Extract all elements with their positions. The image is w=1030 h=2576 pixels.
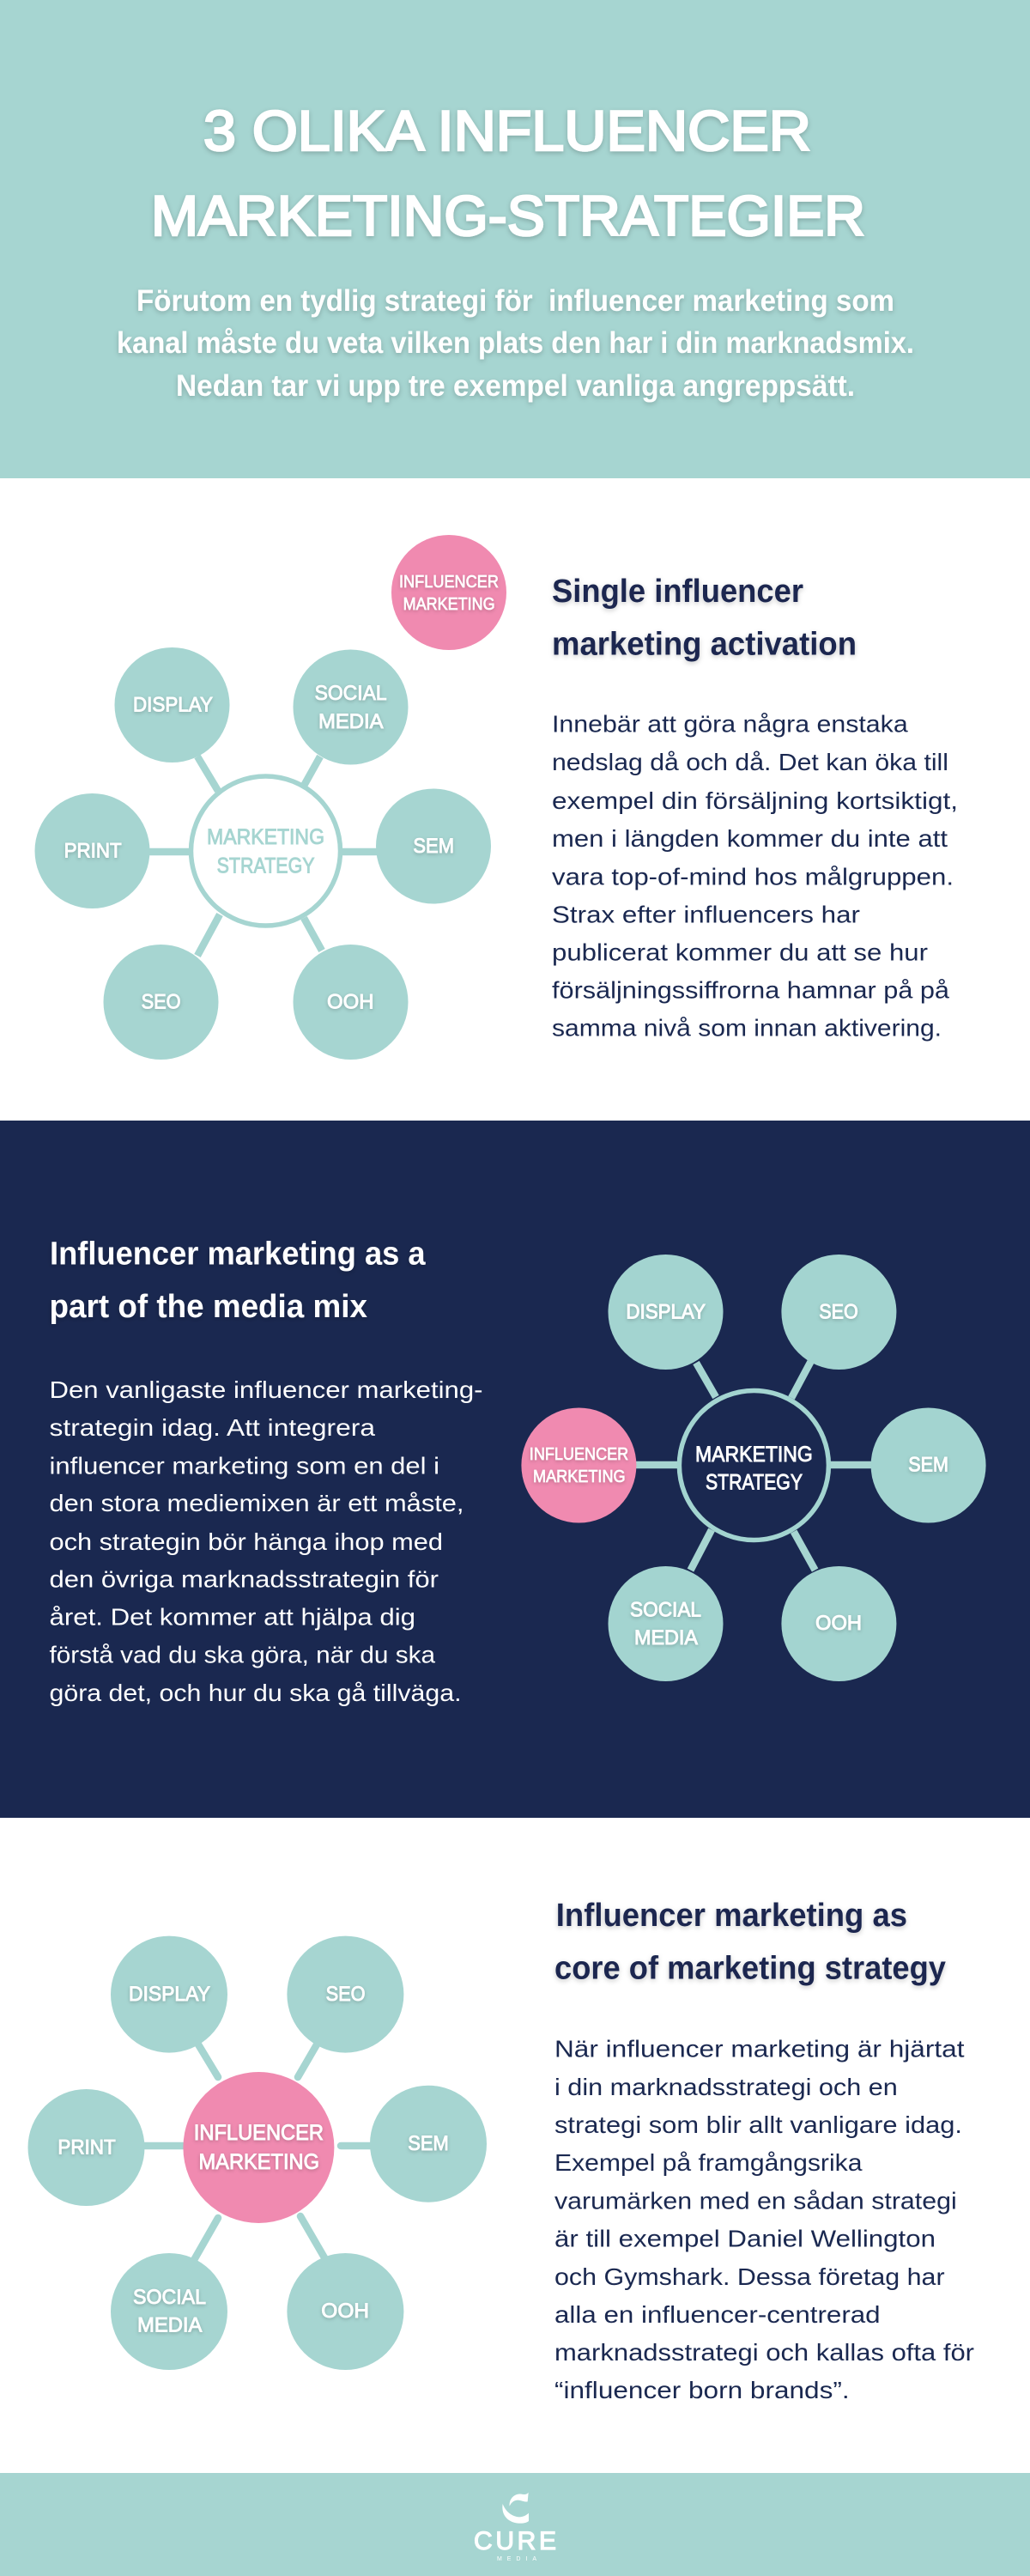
node: social media: MEDIA xyxy=(634,1626,698,1649)
intro text: kanal måste du veta vilken plats den har i din marknadsmix. xyxy=(117,326,914,360)
body text: single activation: nedslag då och då. Det kan öka till xyxy=(552,749,948,775)
title: 3 OLIKA INFLUENCER xyxy=(203,99,811,162)
node: social media: MEDIA xyxy=(137,2313,202,2337)
panel: influencer marketing as part of the media mix xyxy=(0,1121,1030,1818)
body text: single activation: samma nivå som innan aktivering. xyxy=(552,1015,942,1041)
hub: marketing strategy: MARKETING xyxy=(695,1443,813,1467)
node: display: DISPLAY xyxy=(133,694,213,717)
node: print xyxy=(34,793,149,908)
body text: media mix: strategin idag. Att integrera xyxy=(50,1414,375,1441)
body text: core strategy: är till exempel Daniel Wellington xyxy=(554,2226,936,2252)
node: influencer marketing: INFLUENCER xyxy=(399,573,499,592)
body text: media mix: året. Det kommer att hjälpa dig xyxy=(50,1604,415,1631)
body text: core strategy: varumärken med en sådan strategi xyxy=(554,2188,957,2215)
node: seo: SEO xyxy=(819,1300,858,1324)
body text: media mix: den övriga marknadsstrategin för xyxy=(50,1566,439,1593)
heading: core of marketing strategy: Influencer marketing as xyxy=(556,1898,907,1934)
node: social media xyxy=(294,649,409,764)
diagram: marketing strategy with influencer marketing as a channel xyxy=(521,1255,986,1681)
body text: media mix: och strategin bör hänga ihop med xyxy=(50,1528,443,1555)
heading: single influencer marketing activation: Single influencer xyxy=(552,574,803,610)
body text: single activation xyxy=(552,711,958,1041)
title xyxy=(151,99,865,247)
hub: marketing strategy: STRATEGY xyxy=(706,1471,803,1495)
node: sem: SEM xyxy=(408,2132,449,2155)
body text: core strategy xyxy=(554,2035,974,2403)
node: ooh: OOH xyxy=(327,991,374,1013)
body text: single activation: men i längden kommer du inte att xyxy=(552,825,948,852)
node: seo: SEO xyxy=(142,991,181,1013)
panel: influencer marketing as core of marketing strategy xyxy=(0,1818,1030,2473)
body text: single activation: Strax efter influencers har xyxy=(552,902,860,928)
node: social media: SOCIAL xyxy=(315,682,387,705)
hub: influencer marketing: MARKETING xyxy=(199,2150,319,2174)
intro text: Förutom en tydlig strategi för influencer marketing som xyxy=(136,284,894,318)
logo wordmark: MEDIA xyxy=(497,2556,536,2562)
node: ooh xyxy=(287,2253,403,2370)
node: display xyxy=(115,647,230,762)
icon: cure media logo mark xyxy=(502,2493,529,2524)
diagram: influencer marketing at the centre xyxy=(27,1936,487,2370)
node: sem xyxy=(376,788,491,903)
node: display xyxy=(111,1936,227,2053)
node: social media: MEDIA xyxy=(318,710,384,733)
panel: footer xyxy=(0,2473,1030,2576)
hub: marketing strategy: MARKETING xyxy=(207,825,324,849)
body text: core strategy: i din marknadsstrategi och en xyxy=(554,2074,898,2100)
node: seo xyxy=(781,1255,896,1370)
body text: core strategy: När influencer marketing är hjärtat xyxy=(554,2035,965,2063)
body text: media mix: Den vanligaste influencer marketing- xyxy=(50,1376,482,1403)
heading: part of the media mix xyxy=(50,1236,426,1325)
body text: single activation: försäljningssiffrorna hamnar på på xyxy=(552,976,949,1003)
heading: part of the media mix: part of the media mix xyxy=(50,1289,367,1325)
heading: core of marketing strategy: core of marketing strategy xyxy=(554,1951,946,1987)
body text: core strategy: marknadsstrategi och kallas ofta för xyxy=(554,2339,974,2366)
node: display: DISPLAY xyxy=(626,1300,706,1324)
node: social media: SOCIAL xyxy=(133,2286,206,2309)
panel: single influencer marketing activation xyxy=(0,478,1030,1121)
heading: single influencer marketing activation xyxy=(552,574,857,662)
body text: core strategy: strategi som blir allt vanligare idag. xyxy=(554,2111,962,2138)
node: sem: SEM xyxy=(413,835,454,858)
node: ooh: OOH xyxy=(815,1612,862,1635)
body text: core strategy: och Gymshark. Dessa företag har xyxy=(554,2263,945,2290)
body text: single activation: Innebär att göra några enstaka xyxy=(552,711,908,738)
body text: single activation: exempel din försäljning kortsiktigt, xyxy=(552,787,958,814)
node: display xyxy=(608,1255,723,1370)
body text: core strategy: Exempel på framgångsrika xyxy=(554,2149,863,2176)
node: influencer marketing: MARKETING xyxy=(533,1467,626,1486)
hub: influencer marketing: INFLUENCER xyxy=(194,2121,324,2145)
diagram: marketing strategy with separate influencer marketing xyxy=(34,535,506,1060)
hub: marketing strategy xyxy=(679,1391,828,1540)
node: influencer marketing: MARKETING xyxy=(403,595,495,614)
title: MARKETING-STRATEGIER xyxy=(151,184,865,247)
body text: core strategy: alla en influencer-centrerad xyxy=(554,2301,881,2328)
body text: media mix: förstå vad du ska göra, när du ska xyxy=(50,1642,435,1668)
node: display: DISPLAY xyxy=(129,1983,210,2006)
logo wordmark: CURE xyxy=(474,2527,556,2555)
heading: part of the media mix: Influencer marketing as a xyxy=(50,1236,426,1273)
heading: single influencer marketing activation: marketing activation xyxy=(552,626,857,662)
node: ooh xyxy=(294,945,409,1060)
hub: marketing strategy: STRATEGY xyxy=(217,854,315,878)
body text: media mix: göra det, och hur du ska gå tillväga. xyxy=(50,1680,462,1706)
node: seo: SEO xyxy=(326,1983,366,2006)
node: influencer marketing xyxy=(521,1408,636,1523)
node: print: PRINT xyxy=(58,2136,116,2160)
node: ooh: OOH xyxy=(321,2300,369,2323)
intro text xyxy=(117,284,914,403)
node: social media: SOCIAL xyxy=(630,1598,701,1621)
node: ooh xyxy=(781,1566,896,1681)
hub: marketing strategy xyxy=(191,776,340,926)
panel: header xyxy=(0,0,1030,478)
node: influencer marketing: INFLUENCER xyxy=(530,1445,628,1464)
node: social media xyxy=(111,2253,227,2370)
body text: media mix: influencer marketing som en del i xyxy=(50,1452,439,1479)
node: print: PRINT xyxy=(64,840,122,863)
body text: single activation: publicerat kommer du att se hur xyxy=(552,939,928,965)
body text: media mix xyxy=(50,1376,482,1706)
hub: influencer marketing xyxy=(183,2072,334,2223)
body text: core strategy: “influencer born brands”. xyxy=(554,2377,850,2403)
node: sem: SEM xyxy=(908,1453,948,1477)
node: seo xyxy=(287,1936,403,2053)
body text: media mix: den stora mediemixen är ett måste, xyxy=(50,1490,464,1516)
node: seo xyxy=(103,945,218,1060)
heading: core of marketing strategy xyxy=(554,1898,946,1987)
node: print xyxy=(27,2089,144,2206)
node: social media xyxy=(608,1566,723,1681)
node: sem xyxy=(370,2086,487,2202)
intro text: Nedan tar vi upp tre exempel vanliga angreppsätt. xyxy=(176,369,855,403)
body text: single activation: vara top-of-mind hos målgruppen. xyxy=(552,864,954,890)
node: sem xyxy=(871,1408,986,1523)
node: influencer marketing xyxy=(391,535,506,650)
